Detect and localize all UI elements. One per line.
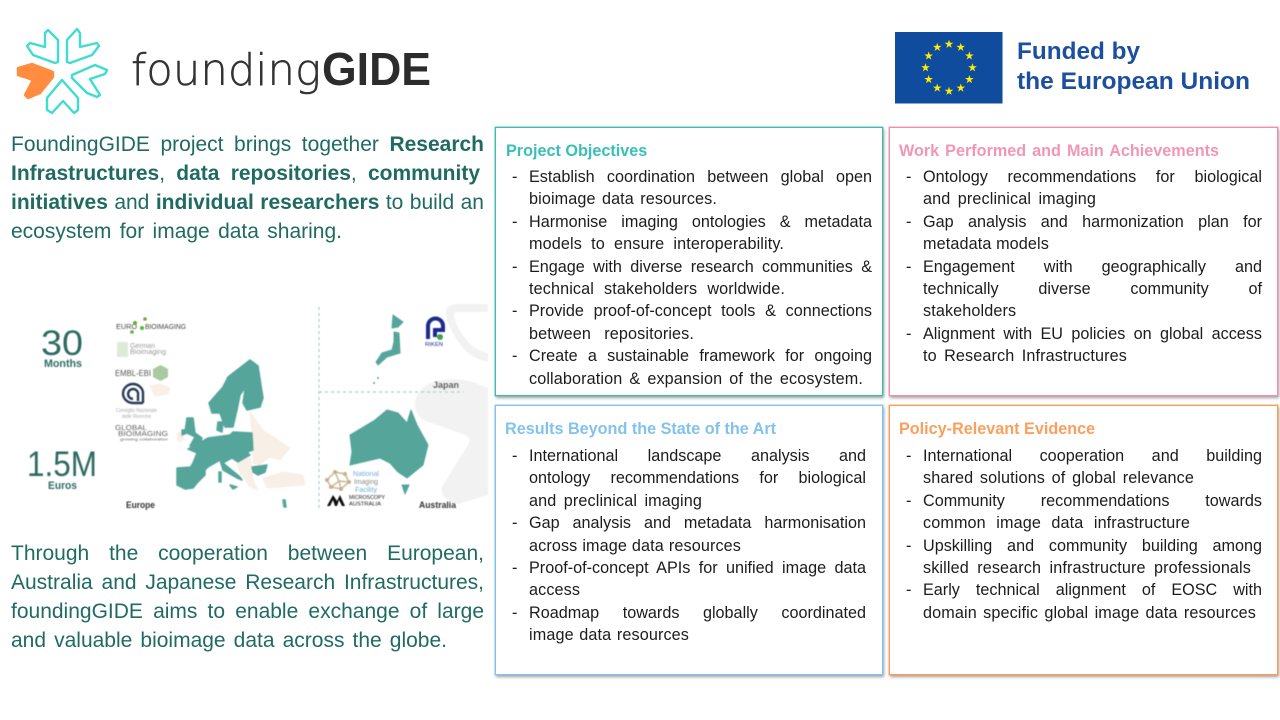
bullet: across image data resources [529,537,741,555]
logo: foundingGIDE [16,28,431,114]
panel: Policy-Relevant Evidence [889,405,1278,675]
bullet: access [529,581,580,599]
text block: cooperation statement: Through the cooperation between European, [11,542,484,565]
logo: Euro-BioImaging: EURO [116,324,138,331]
logo: Microscopy Australia: MICROSCOPY [349,495,385,501]
text block: cooperation statement: Australia and Japanese Research Infrastructures, [11,571,484,594]
panel: Policy-Relevant Evidence: - [906,581,911,599]
heading: Policy-Relevant Evidence [899,420,1095,438]
bullet: Engagement with geographically and [923,258,1262,276]
bullet [512,514,866,555]
bullet: technical stakeholders worldwide. [529,280,785,298]
logo: EMBL-EBI [115,365,168,381]
bullet: and preclinical imaging [923,190,1096,208]
wordmark: GIDE [322,43,431,95]
logo: RIKEN [425,318,443,348]
panel: Project Objectives: - [512,168,517,186]
bullet [906,168,1262,208]
bullet: bioimage data resources. [529,190,717,208]
panel: Policy-Relevant Evidence: - [906,447,911,465]
logo: National Imaging Facility [325,469,379,494]
logo: Microscopy Australia [327,495,385,508]
panel: Project Objectives: - [512,258,517,276]
region dividers [319,307,464,511]
bullet [512,213,872,253]
text block: cooperation statement [11,542,484,652]
logo: Global BioImaging: growing collaboration [120,436,168,442]
panel: Results Beyond the State of the Art: - [512,447,517,465]
infographic: consortium map with facts and partner logos [27,304,488,511]
logo: Euro-BioImaging [116,317,186,334]
panel: Policy-Relevant Evidence: - [906,537,911,555]
logo: Consiglio Nazionale delle Ricerche: delle Ricerche [122,414,151,420]
logo: National Imaging Facility: Facility [355,485,377,494]
logo: Global BioImaging: GLOBAL [115,425,147,432]
panel: Work Performed and Main Achievements: - [906,258,911,276]
fact: budget: Euros [48,480,77,492]
fact: budget: 1.5M [27,445,97,484]
panel: Results Beyond the State of the Art: - [512,514,517,532]
bullet [512,168,872,208]
bullet: domain specific global image data resources [923,604,1256,622]
panel: Work Performed and Main Achievements [889,127,1278,396]
bullet: metadata models [923,235,1049,253]
bullet: models to ensure interoperability. [529,235,784,253]
bullet [512,258,872,298]
bullet: collaboration & expansion of the ecosystem. [529,370,863,388]
bullet [906,213,1262,253]
heading: Results Beyond the State of the Art [505,420,776,438]
bullet: Provide proof-of-concept tools & connections [529,302,872,320]
logo: EMBL-EBI: EMBL-EBI [115,369,151,378]
bullet: International cooperation and building [923,447,1262,465]
map: Europe [150,360,305,507]
panel: Results Beyond the State of the Art: - [512,604,517,622]
text block: project introduction: FoundingGIDE project brings together Research [11,133,484,156]
achievements list [906,168,1262,365]
region label: Australia: Australia [419,500,457,511]
text block: cooperation statement: foundingGIDE aims to enable exchange of large [11,600,484,623]
bullet: Community recommendations towards [923,492,1262,510]
bullet [906,325,1262,365]
bullet: Ontology recommendations for biological [923,168,1262,186]
bullet: Alignment with EU policies on global access [923,325,1262,343]
bullet: Establish coordination between global open [529,168,872,186]
bullet: International landscape analysis and [529,447,866,465]
logo: National Imaging Facility: Imaging [354,477,378,486]
map: Australia [350,410,428,494]
bullet: Proof-of-concept APIs for unified image data [529,559,866,577]
logo: Funded by the European Union [895,32,1250,104]
text block: cooperation statement: and valuable bioimage data across the globe. [11,629,447,652]
bullet: Engage with diverse research communities & [529,258,872,276]
logo: German BioImaging: German [130,343,155,350]
bullet: Early technical alignment of EOSC with [923,581,1262,599]
logo: Microscopy Australia: AUSTRALIA [349,502,381,508]
panel: Project Objectives: - [512,302,517,320]
bullet: and preclinical imaging [529,492,702,510]
map: Japan [374,315,403,384]
text block: project introduction: Infrastructures, data repositories, community [11,162,480,185]
watermark shape [415,304,488,504]
funding statement: the European Union [1017,68,1250,95]
panel: Results Beyond the State of the Art [495,405,883,675]
bullet [512,447,866,510]
heading: Project Objectives [506,142,647,160]
bullet: Roadmap towards globally coordinated [529,604,866,622]
logo: RIKEN: RIKEN [425,342,443,348]
heading: Work Performed and Main Achievements [899,142,1219,160]
logo: German BioImaging: Bioimaging [130,349,166,356]
bullet [906,537,1262,577]
panel: Policy-Relevant Evidence: - [906,492,911,510]
bullet: skilled research infrastructure professionals [923,559,1251,577]
bullet: Gap analysis and harmonization plan for [923,213,1262,231]
evidence list [906,447,1262,622]
logo: Consiglio Nazionale delle Ricerche: Consiglio Nazionale [116,408,157,414]
logo: Euro-BioImaging: BIOIMAGING [145,324,186,331]
bullet: stakeholders [923,302,1016,320]
text block: project introduction [11,133,484,243]
bullet: between repositories. [529,325,694,343]
logo: Global BioImaging: BIOIMAGING [118,431,168,438]
bullet: technically diverse community of [923,280,1262,298]
bullet: Create a sustainable framework for ongoing [529,347,872,365]
text block: project introduction: initiatives and individual researchers to build an [11,191,484,214]
bullet: image data resources [529,626,689,644]
panel: Project Objectives [495,127,883,396]
bullet [512,347,872,388]
bullet [906,258,1262,320]
panel: Work Performed and Main Achievements: - [906,325,911,343]
wordmark: founding [131,45,321,96]
bullet: ontology recommendations for biological [529,469,866,487]
logo: German BioImaging [117,342,166,357]
region label: Japan: Japan [433,380,459,391]
logo: National Imaging Facility: National [353,469,379,478]
region label: Europe: Europe [126,500,155,511]
bullet: common image data infrastructure [923,514,1190,532]
bullet: Upskilling and community building among [923,537,1262,555]
bullet [906,581,1262,622]
bullet [906,447,1262,487]
bullet [512,559,866,599]
bullet: shared solutions of global relevance [923,469,1194,487]
bullet: to Research Infrastructures [923,347,1127,365]
bullet [512,604,866,644]
fact: duration: 30 [41,324,83,363]
bullet: Gap analysis and metadata harmonisation [529,514,866,532]
fact: duration: Months [44,358,82,370]
bullet [512,302,872,343]
results list [512,447,866,644]
panel: Project Objectives: - [512,347,517,365]
bullet: Harmonise imaging ontologies & metadata [529,213,872,231]
logo: Consiglio Nazionale delle Ricerche [116,384,157,420]
funding statement: Funded by [1017,38,1141,65]
panel: Project Objectives: - [512,213,517,231]
logo: Global BioImaging [115,425,168,442]
panel: Results Beyond the State of the Art: - [512,559,517,577]
objectives list [512,168,872,388]
panel: Work Performed and Main Achievements: - [906,213,911,231]
icon: snowflake of chevrons [18,29,107,113]
panel: Work Performed and Main Achievements: - [906,168,911,186]
text block: project introduction: ecosystem for image data sharing. [11,220,342,243]
bullet [906,492,1262,532]
icon: EU flag [895,32,1002,104]
